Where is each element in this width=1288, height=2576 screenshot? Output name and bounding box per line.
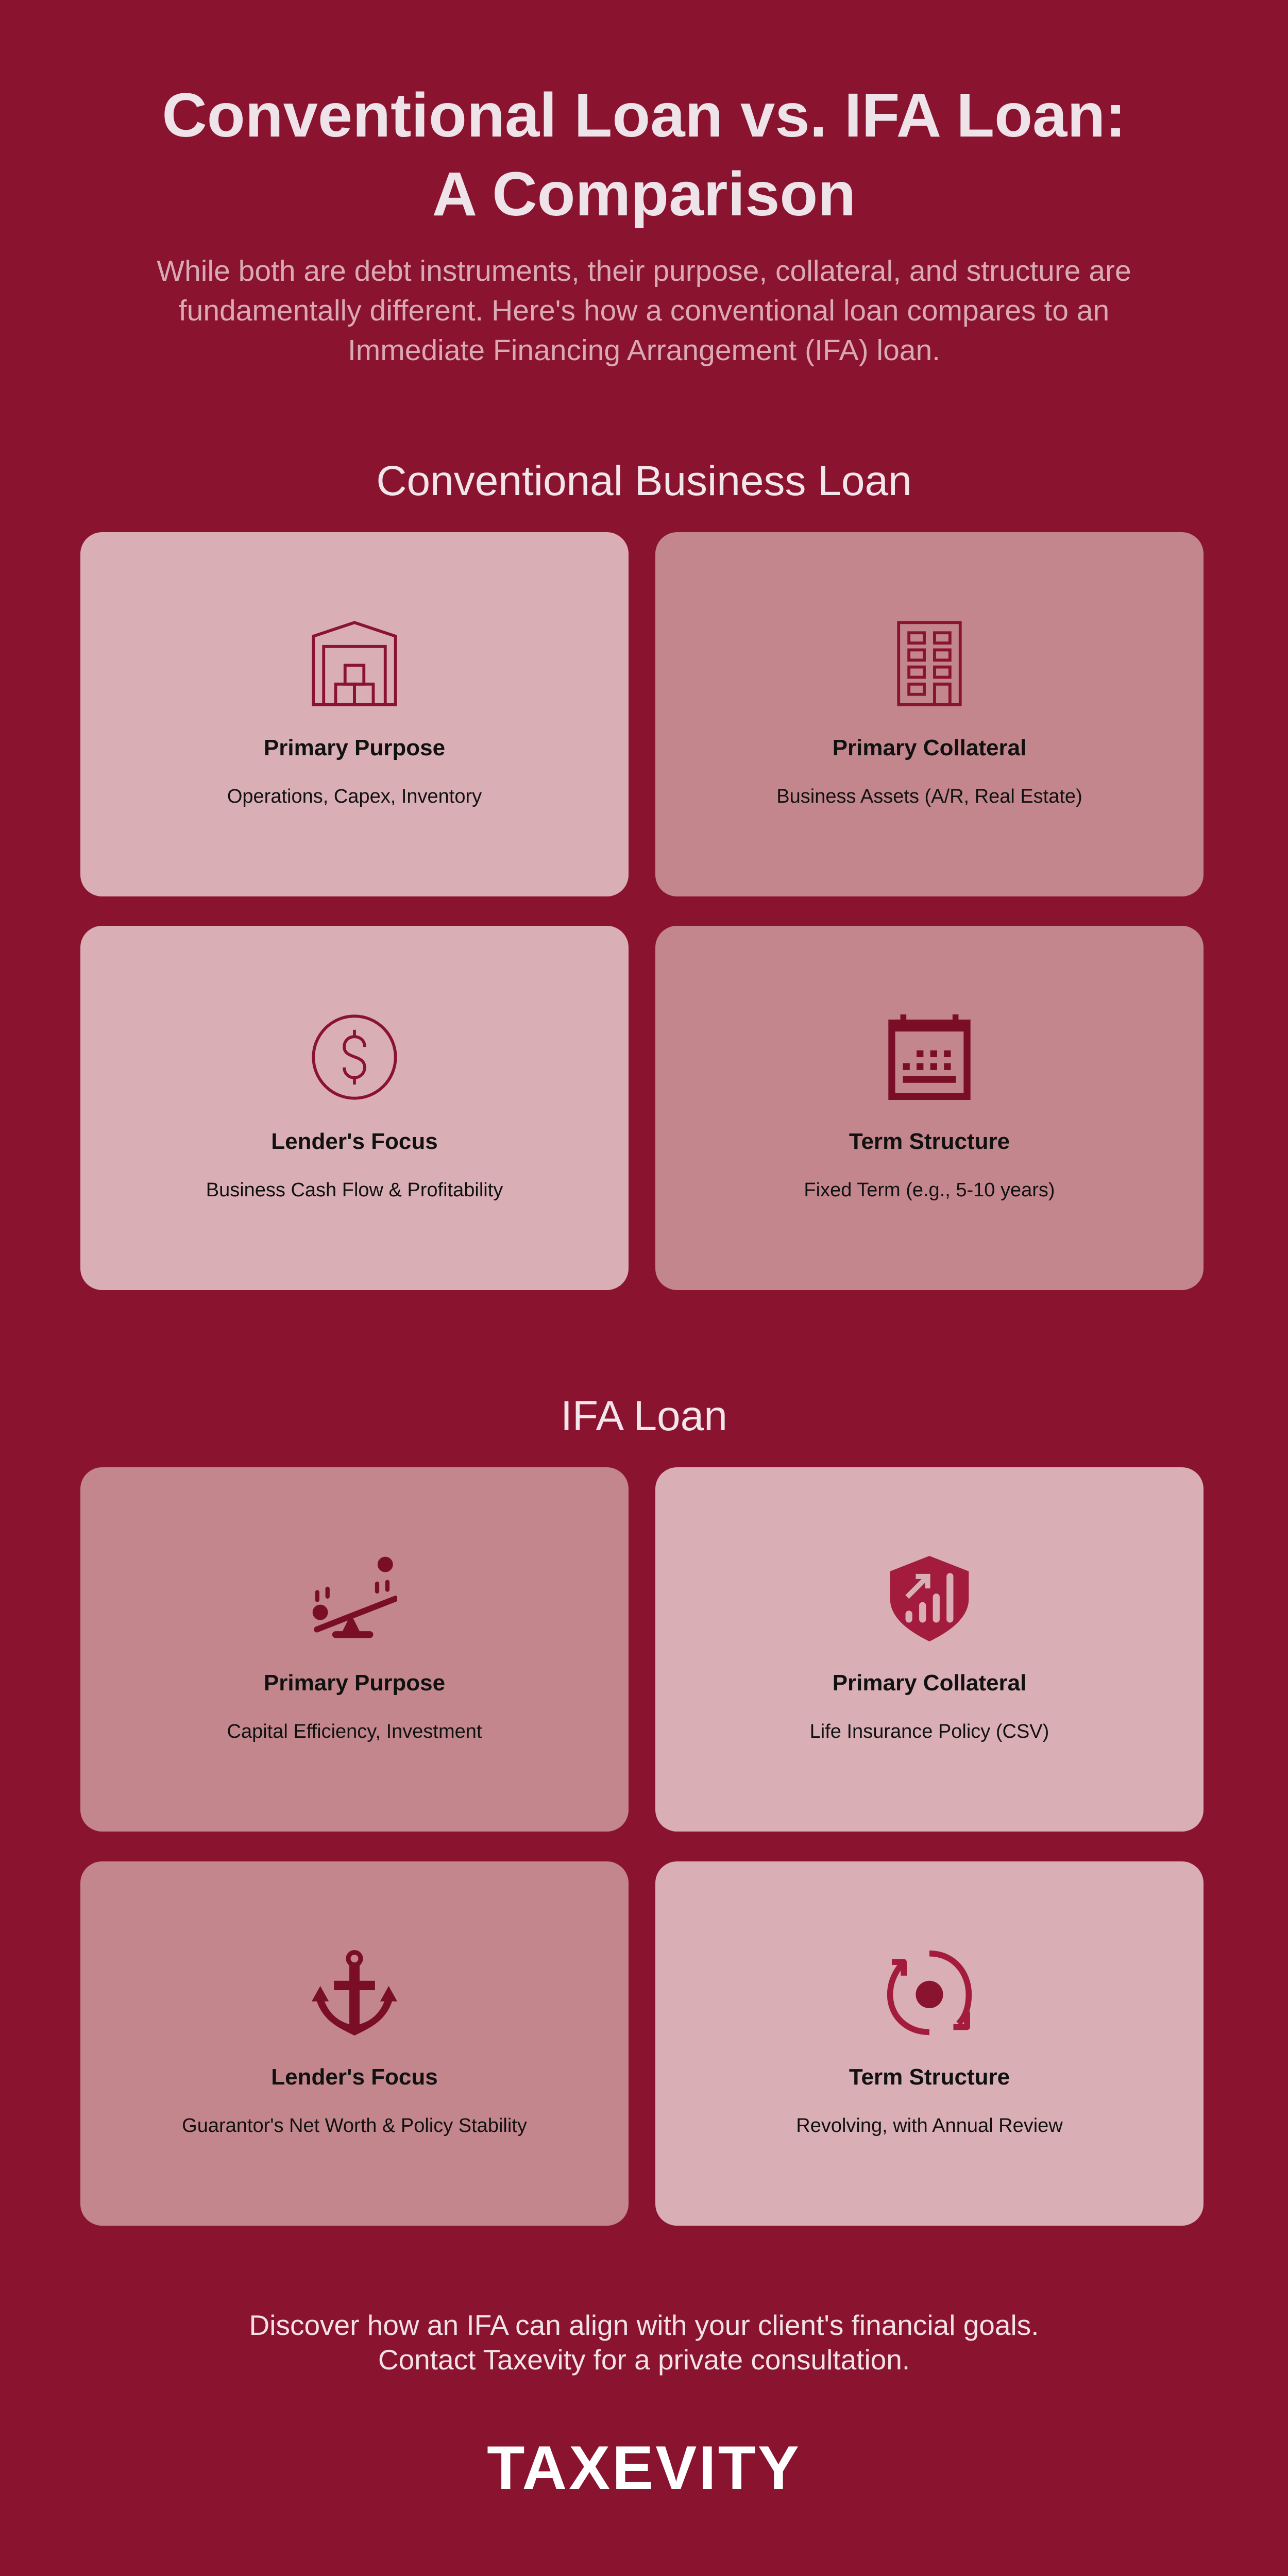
icon: calendar <box>888 1014 971 1100</box>
subtitle: fundamentally different. Here's how a conventional loan compares to an <box>179 294 1109 327</box>
footer text <box>249 2309 1039 2376</box>
icon: seesaw <box>312 1557 397 1638</box>
card: conventional lender's focus: Lender's Focus <box>271 1129 438 1154</box>
card: IFA lender's focus: Lender's Focus <box>271 2064 438 2090</box>
card: IFA primary purpose <box>80 1467 629 1832</box>
card: conventional term structure: Term Structure <box>849 1129 1010 1154</box>
icon: warehouse <box>312 621 397 706</box>
card: conventional term structure <box>655 926 1204 1290</box>
card: conventional primary collateral: Business Assets (A/R, Real Estate) <box>776 786 1082 807</box>
card: IFA term structure: Term Structure <box>849 2064 1010 2090</box>
card: IFA primary collateral: Primary Collateral <box>833 1670 1026 1696</box>
card: conventional term structure: Fixed Term (e.g., 5-10 years) <box>804 1179 1055 1201</box>
footer text: Discover how an IFA can align with your client's financial goals. <box>249 2309 1039 2341</box>
card: conventional primary collateral <box>655 532 1204 896</box>
card: conventional primary purpose: Primary Purpose <box>264 735 445 760</box>
footer text: Contact Taxevity for a private consultation. <box>378 2344 910 2376</box>
card: IFA primary collateral <box>655 1467 1204 1832</box>
title <box>162 80 1126 229</box>
title: Conventional Loan vs. IFA Loan: <box>162 80 1126 150</box>
card: conventional primary purpose: Operations, Capex, Inventory <box>227 786 482 807</box>
card: IFA primary purpose: Primary Purpose <box>264 1670 445 1696</box>
card: IFA term structure <box>655 1861 1204 2226</box>
card: IFA term structure: Revolving, with Annual Review <box>796 2115 1063 2137</box>
card: IFA primary purpose: Capital Efficiency, Investment <box>227 1721 482 1742</box>
card: conventional lender's focus <box>80 926 629 1290</box>
subtitle: While both are debt instruments, their purpose, collateral, and structure are <box>157 255 1131 287</box>
icon: dollar coin <box>312 1014 397 1100</box>
logo: TAXEVITY: TAXEVITY <box>487 2433 801 2502</box>
title: A Comparison <box>432 159 856 229</box>
icon: anchor <box>312 1950 397 2036</box>
card: IFA lender's focus: Guarantor's Net Worth & Policy Stability <box>182 2115 527 2137</box>
subtitle: Immediate Financing Arrangement (IFA) loan. <box>348 334 940 367</box>
heading: IFA: IFA Loan <box>561 1393 727 1439</box>
card: IFA lender's focus <box>80 1861 629 2226</box>
heading: conventional: Conventional Business Loan <box>376 457 912 504</box>
subtitle <box>157 255 1131 367</box>
icon: building <box>897 621 962 706</box>
icon: revolving <box>887 1951 972 2035</box>
card: IFA primary collateral: Life Insurance Policy (CSV) <box>810 1721 1049 1742</box>
card: conventional primary collateral: Primary Collateral <box>833 735 1026 760</box>
card: conventional lender's focus: Business Cash Flow & Profitability <box>206 1179 503 1201</box>
card: conventional primary purpose <box>80 532 629 896</box>
icon: shield chart <box>890 1556 969 1641</box>
